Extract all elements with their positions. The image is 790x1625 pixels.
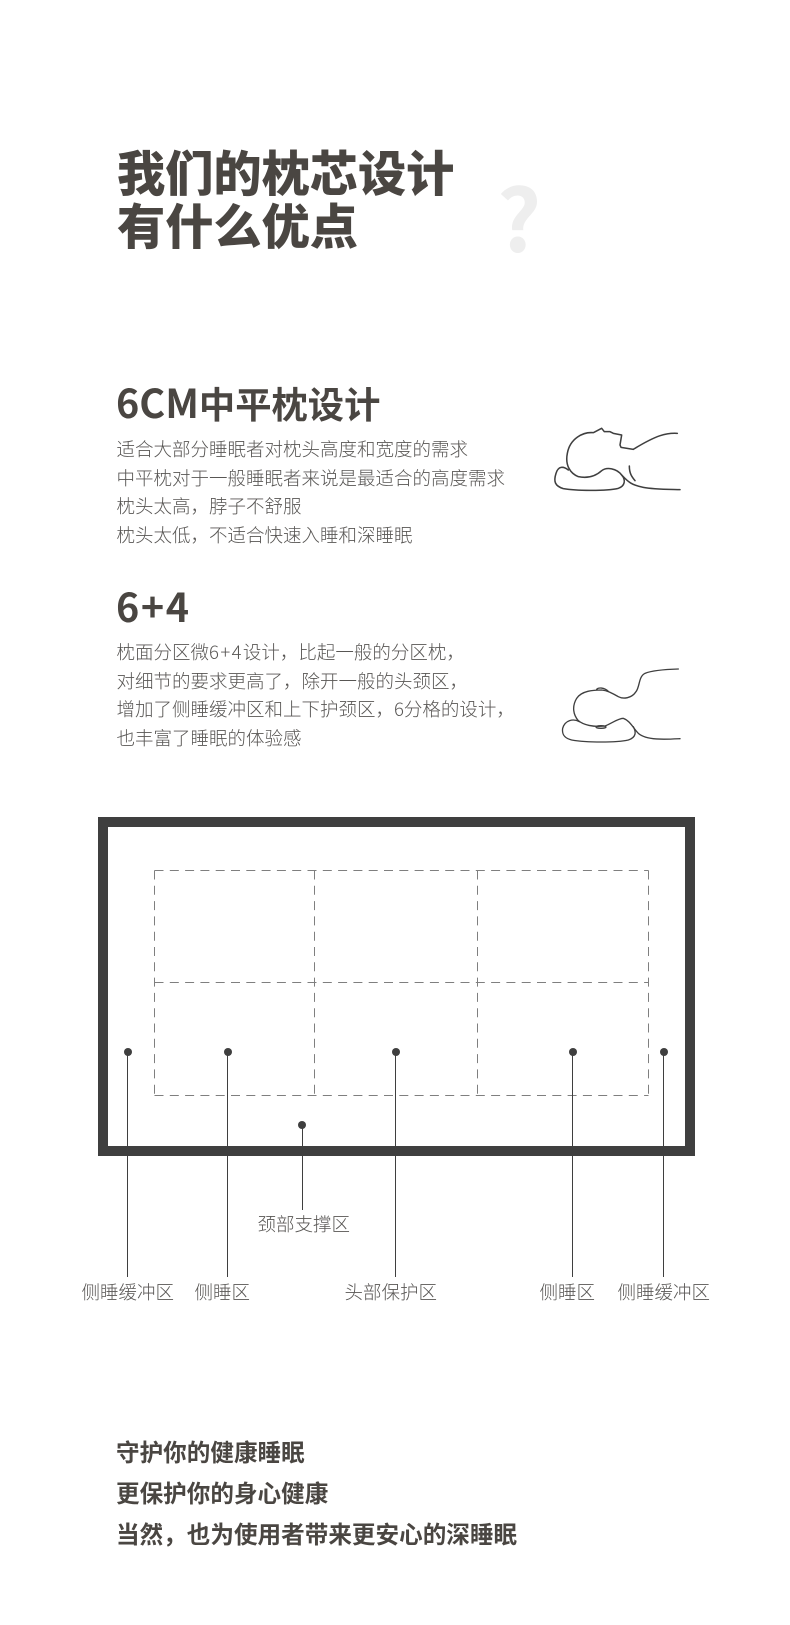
icon: person lying on back on pillow [554,428,681,492]
closing statement: 更保护你的身心健康 [116,1475,328,1509]
label: neck support zone: 颈部支撑区 [258,1211,350,1237]
text block: 6+4 description: 枕面分区微6+4设计，比起一般的分区枕， [116,639,465,665]
dashed zone grid [154,870,648,1096]
text block: 6+4 description: 增加了侧睡缓冲区和上下护颈区，6分格的设计， [116,696,515,722]
label: right side-sleep zone: 侧睡区 [540,1279,595,1305]
icon: person lying on side on pillow [562,668,681,743]
label: left side-sleep zone: 侧睡区 [194,1279,250,1305]
text block: 6+4 description: 对细节的要求更高了，除开一般的头颈区， [116,668,468,694]
title: 有什么优点 [117,188,358,258]
heading: 6CM medium-height pillow: 6CM中平枕设计 [116,373,380,430]
text block: 6CM description: 枕头太高，脖子不舒服 [116,493,302,519]
text block: 6CM description: 枕头太低，不适合快速入睡和深睡眠 [116,522,413,548]
text block: 6+4 description: 也丰富了睡眠的体验感 [116,725,302,751]
decorative question mark: ? [497,152,541,277]
label: left side-sleep buffer zone: 侧睡缓冲区 [82,1279,174,1305]
pillow outline frame [103,822,690,1151]
closing statement [116,1434,517,1550]
pillow zone diagram [98,817,695,1277]
text block: 6+4 description [116,639,515,751]
text block: 6CM description: 适合大部分睡眠者对枕头高度和宽度的需求 [116,436,468,462]
label: head protection zone: 头部保护区 [344,1279,437,1305]
text block: 6CM description: 中平枕对于一般睡眠者来说是最适合的高度需求 [116,465,505,491]
title: 我们的枕芯设计 [117,135,454,205]
label: right side-sleep buffer zone: 侧睡缓冲区 [618,1279,710,1305]
closing statement: 守护你的健康睡眠 [116,1434,305,1468]
callout leader lines and dots [124,1048,668,1277]
title [117,135,454,258]
closing statement: 当然，也为使用者带来更安心的深睡眠 [116,1516,517,1550]
heading: 6+4: 6+4 [116,577,191,634]
text block: 6CM description [116,436,505,548]
